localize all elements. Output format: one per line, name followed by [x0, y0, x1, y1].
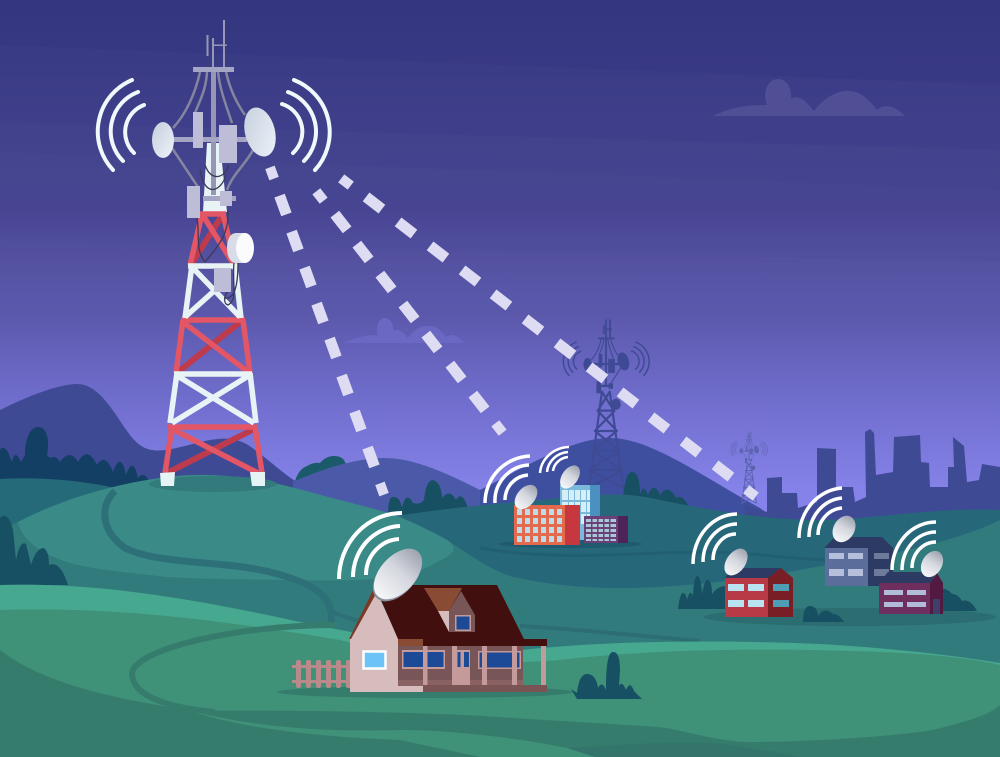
porch floor	[423, 685, 547, 692]
red house	[725, 568, 793, 617]
main house dish	[364, 540, 431, 610]
distant tower	[563, 320, 649, 488]
pink gable wall	[350, 588, 423, 692]
dormer	[424, 588, 475, 632]
purple house waves	[892, 522, 936, 570]
foreground light strip	[195, 712, 595, 757]
dish: blue office	[556, 462, 584, 492]
right house shadow	[704, 608, 996, 626]
red office	[514, 505, 580, 545]
dashed signal beam to office cluster	[312, 188, 507, 436]
cables	[197, 165, 238, 305]
front windows	[402, 650, 521, 685]
left dish	[152, 122, 174, 158]
bush on blue hill	[293, 456, 350, 490]
cluster shadow	[498, 540, 642, 548]
front wall	[398, 646, 523, 686]
dashed signal beam to distant houses	[338, 174, 759, 501]
slate building	[825, 537, 893, 586]
shadow under main tower	[149, 476, 277, 492]
far hills	[0, 384, 1000, 540]
tree line: far left	[0, 427, 152, 490]
fence	[292, 660, 352, 688]
bush right of purple house	[935, 589, 977, 611]
tower back braces	[167, 214, 254, 473]
tree line: hill crest	[388, 480, 470, 515]
bush beside red house	[678, 576, 730, 609]
red house waves	[693, 514, 737, 564]
roof	[375, 585, 547, 646]
house shadow	[277, 686, 573, 698]
road branch	[333, 612, 380, 626]
blue office	[560, 485, 600, 540]
dish: red office	[510, 480, 542, 514]
trees right of distant tower	[622, 472, 692, 515]
main house	[277, 585, 573, 698]
farthest tower	[731, 432, 767, 503]
teal mid hills	[0, 478, 1000, 650]
waves: blue office	[540, 447, 569, 473]
cloud: middle	[343, 318, 465, 343]
purple house	[879, 572, 943, 614]
tower red segments	[165, 214, 262, 473]
mast and top antennas	[173, 20, 247, 201]
foreground dark wedge	[567, 742, 800, 757]
bush near porch	[571, 652, 642, 699]
red house dish	[720, 544, 752, 580]
main tower	[152, 20, 281, 486]
foreground hills	[0, 585, 1000, 757]
waves: red office	[485, 456, 530, 503]
purple house dish	[916, 547, 948, 581]
tower white segments	[170, 265, 256, 423]
panel antennas	[187, 112, 237, 292]
winding road on hill	[105, 491, 331, 622]
signal waves: main tower right	[282, 80, 330, 170]
main house waves	[339, 513, 402, 579]
tower upper white section	[203, 143, 227, 212]
slate building waves	[799, 488, 842, 538]
guy wires	[172, 72, 253, 190]
bush centre right	[803, 606, 844, 622]
right dish	[239, 104, 281, 160]
dashed signal beam to house	[265, 166, 389, 496]
white drum antenna	[227, 233, 254, 263]
cloud: upper right	[713, 79, 905, 116]
big green hill and right slope	[0, 475, 1000, 720]
purple office	[584, 516, 628, 543]
office cluster	[485, 447, 642, 548]
slate building dish	[828, 512, 860, 546]
tower feet	[160, 472, 175, 486]
eave	[398, 639, 423, 646]
foreground road ring	[132, 625, 335, 712]
roof trim	[349, 586, 377, 639]
signal waves: main tower left	[98, 80, 144, 170]
porch columns	[423, 646, 546, 686]
gable window	[364, 652, 386, 668]
bush: left foreground	[0, 516, 68, 585]
foreground dark slope	[0, 650, 1000, 757]
lighter hill cap	[18, 475, 454, 581]
